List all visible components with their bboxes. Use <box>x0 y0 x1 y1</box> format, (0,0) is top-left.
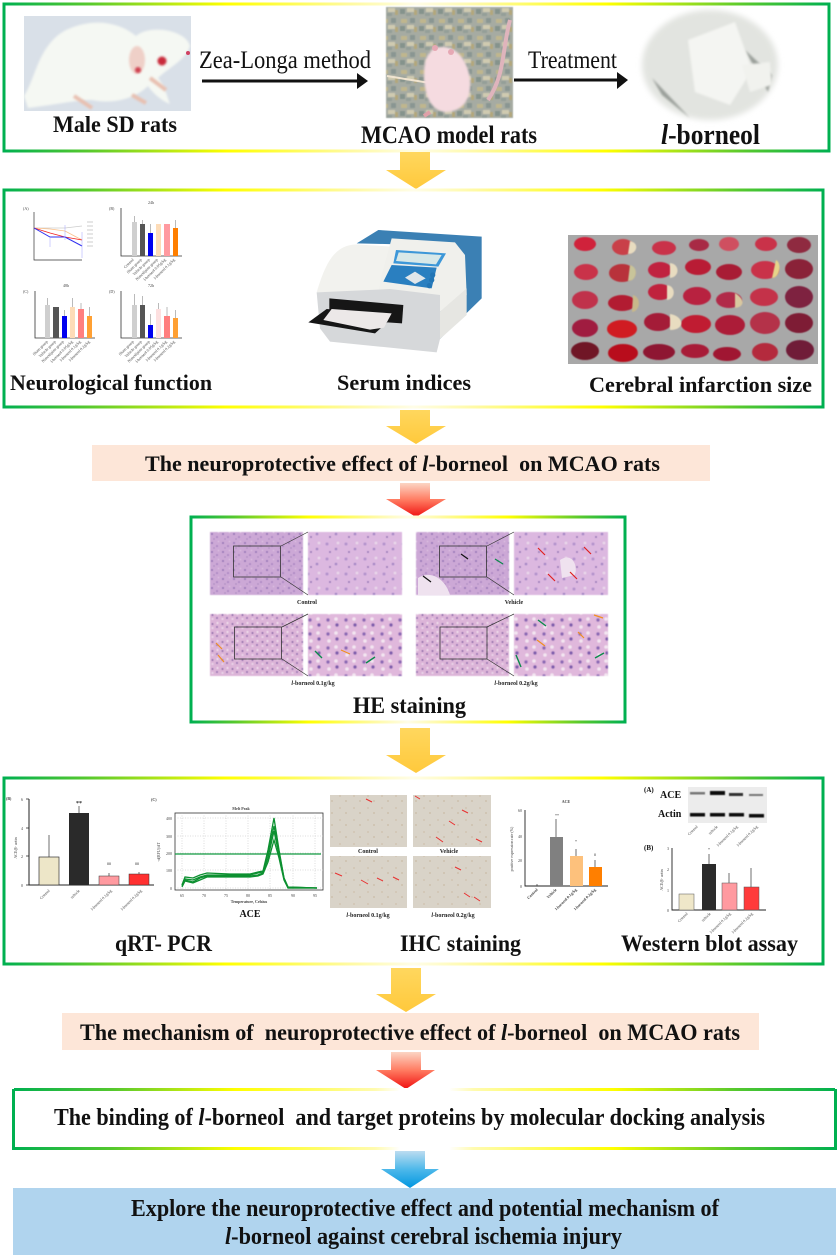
images: IHC micrographs: Control <box>358 849 378 855</box>
label: qRT-PCR: qRT- PCR <box>115 931 212 956</box>
chart: Western blot bars: l-borneol 0.1g/kg <box>709 911 732 934</box>
chart: melt peak curve: Melt Peak <box>232 806 250 811</box>
chart: Western blot bars: 2 <box>667 867 669 872</box>
label: MCAO model rats: MCAO model rats <box>361 122 537 149</box>
chart: score bars (B) <box>109 200 182 282</box>
label: Western blot assay: Western blot assay <box>621 931 798 956</box>
label: Serum indices: Serum indices <box>337 370 471 395</box>
chart: neurological score line (A): (A) <box>23 206 29 211</box>
chart: score bars (C): Vehicle group <box>37 339 57 358</box>
arrow: yellow down 2 <box>386 410 446 444</box>
arrow: red down 2 <box>376 1052 435 1089</box>
chart: IHC positive rate: ** <box>555 813 559 818</box>
chart: melt peak curve: 90 <box>291 893 295 898</box>
chart: IHC positive rate: * <box>575 839 577 844</box>
chart: IHC positive rate: ACE <box>562 799 571 804</box>
chart: qRT-PCR bars: Control <box>39 888 51 900</box>
chart: score bars (D) <box>109 283 182 364</box>
chart: melt peak curve: 300 <box>166 834 172 839</box>
photo: l-borneol crystals <box>642 10 778 120</box>
chart: melt peak curve: 400 <box>166 816 172 821</box>
label: Neurological function: Neurological function <box>10 370 212 395</box>
image: Western blot bands: vehicle <box>707 824 719 836</box>
chart: IHC positive rate: 60 <box>518 808 522 813</box>
chart: score bars (C) <box>23 283 95 364</box>
chart: qRT-PCR bars <box>6 796 154 911</box>
arrow: red down 1 <box>386 483 446 517</box>
image: Vehicle micrographs <box>416 532 608 606</box>
panel: HE staining <box>191 517 625 722</box>
chart: Western blot bars: * <box>708 847 710 852</box>
chart: qRT-PCR bars: 6 <box>21 797 23 802</box>
chart: IHC positive rate: 40 <box>518 834 522 839</box>
image: l-borneol 0.2 micrographs <box>416 614 608 687</box>
chart: melt peak curve: 100 <box>166 868 172 873</box>
chart: neurological score line (A) <box>23 206 93 260</box>
label: Cerebral infarction size: Cerebral infarction size <box>589 372 812 397</box>
text: Zea-Longa method: Zea-Longa method <box>199 47 371 74</box>
chart: qRT-PCR bars: 2 <box>21 854 23 859</box>
conclusion box: Explore the neuroprotective effect and potential mechanism of <box>131 1196 720 1222</box>
chart: score bars (C): l-borneol 0.05g/kg <box>49 339 74 364</box>
chart: score bars (B): 24h <box>148 200 154 205</box>
banner: neuroprotective effect <box>92 445 710 481</box>
chart: melt peak curve: 70 <box>202 893 206 898</box>
chart: score bars (D): (D) <box>109 289 115 294</box>
chart: score bars (C): (C) <box>23 289 29 294</box>
chart: Western blot bars: (B) <box>644 844 654 852</box>
chart: Western blot bars: 0 <box>667 908 669 913</box>
chart: IHC positive rate: l-borneol 0.1g/kg <box>554 887 578 911</box>
chart: IHC positive rate: positive expression rate (%) <box>509 826 514 871</box>
chart: Western blot bars: 3 <box>667 846 669 851</box>
image: Vehicle micrographs: Vehicle <box>505 600 524 606</box>
chart: melt peak curve: 95 <box>313 893 317 898</box>
chart: IHC positive rate: Vehicle <box>545 887 558 899</box>
chart: score bars (D): l-borneol 0.2g/kg <box>153 339 176 362</box>
chart: Western blot bars <box>644 844 766 934</box>
chart: Western blot bars: ACE/β- actin <box>659 869 664 891</box>
conclusion box <box>13 1188 836 1255</box>
chart: qRT-PCR bars: ## <box>135 861 139 866</box>
chart: melt peak curve: 85 <box>268 893 272 898</box>
image: l-borneol 0.2 micrographs: l-borneol 0.2g/kg <box>494 681 538 687</box>
panel: molecular docking <box>12 1089 837 1150</box>
chart: qRT-PCR bars: 0 <box>21 883 23 888</box>
chart: melt peak curve: -d(RFU)/dT <box>156 842 161 862</box>
images: IHC micrographs <box>330 795 491 919</box>
chart: melt peak curve: 65 <box>180 893 184 898</box>
chart: melt peak curve: 75 <box>224 893 228 898</box>
chart: score bars (B): Sham group <box>125 257 143 274</box>
image: Western blot bands: (A) <box>644 786 654 794</box>
chart: score bars (B): l-borneol 0.1g/kg <box>153 257 176 280</box>
chart: Western blot bars: vehicle <box>700 911 712 923</box>
chart: IHC positive rate <box>509 799 608 911</box>
chart: score bars (D): l-borneol 0.1g/kg <box>145 339 168 362</box>
chart: score bars (C): Sham group <box>31 339 49 356</box>
chart: melt peak curve <box>151 797 323 920</box>
text: Treatment: Treatment <box>528 47 617 74</box>
chart: score bars (B): Vehicle group <box>131 257 151 276</box>
chart: score bars (B): Nimodipine group <box>134 257 159 282</box>
chart: melt peak curve: ACE <box>239 909 261 920</box>
arrow: Zea-Longa <box>202 73 368 89</box>
photo: MCAO model rat <box>386 7 513 118</box>
image: Control micrographs <box>210 532 402 606</box>
chart: melt peak curve: 80 <box>246 893 250 898</box>
photo: male SD rat <box>24 16 191 111</box>
chart: qRT-PCR bars: (B) <box>6 796 12 801</box>
chart: Western blot bars: Control <box>677 911 689 923</box>
chart: score bars (C): 48h <box>63 283 69 288</box>
chart: qRT-PCR bars: ## <box>107 861 111 866</box>
chart: qRT-PCR bars: ** <box>76 801 82 807</box>
arrow: yellow down 3 <box>386 728 446 773</box>
chart: score bars (D): l-borneol 0.05g/kg <box>134 339 159 364</box>
icon: microplate reader <box>308 230 482 352</box>
arrow: blue down <box>381 1151 439 1188</box>
label: l-borneol: l-borneol <box>661 120 760 151</box>
image: Western blot bands: ACE <box>660 790 681 801</box>
chart: Western blot bars: l-borneol 0.2g/kg <box>731 911 754 934</box>
chart: IHC positive rate: 0 <box>520 884 522 889</box>
chart: qRT-PCR bars: l-borneol 0.2g/kg <box>120 888 143 911</box>
banner: mechanism: The mechanism of neuroprotective effect of l-borneol on MCAO rats <box>80 1020 740 1045</box>
chart: Western blot bars: 1 <box>667 888 669 893</box>
images: IHC micrographs: Vehicle <box>440 849 459 855</box>
banner: neuroprotective effect: The neuroprotective effect of l-borneol on MCAO rats <box>145 451 660 476</box>
image: Control micrographs: Control <box>297 600 317 606</box>
chart: melt peak curve: 200 <box>166 851 172 856</box>
chart: qRT-PCR bars: 4 <box>21 826 23 831</box>
chart: score bars (B): l-borneol 0.05g/kg <box>142 257 167 282</box>
chart: qRT-PCR bars: vehicle <box>69 888 81 900</box>
label: HE staining: HE staining <box>353 693 466 718</box>
panel: neuroprotective assays <box>4 190 823 407</box>
chart: score bars (C): l-borneol 0.2g/kg <box>68 339 91 362</box>
chart: IHC positive rate: # <box>594 852 596 857</box>
chart: score bars (D): Sham group <box>117 339 135 356</box>
image: Western blot bands: Control <box>687 824 699 836</box>
chart: score bars (C): l-borneol 0.1g/kg <box>59 339 82 362</box>
chart: melt peak curve: (C) <box>151 797 157 802</box>
chart: melt peak curve: 0 <box>170 886 172 891</box>
image: Western blot bands <box>644 786 767 847</box>
panel: animal model and treatment <box>4 4 829 151</box>
label: Male SD rats: Male SD rats <box>53 112 177 137</box>
arrow: treatment <box>514 72 628 89</box>
chart: IHC positive rate: 20 <box>518 858 522 863</box>
chart: score bars (B): Control <box>123 257 135 269</box>
image: l-borneol 0.1 micrographs: l-borneol 0.1g/kg <box>291 681 335 687</box>
chart: score bars (D): Vehicle group <box>123 339 143 358</box>
chart: score bars (B): (B) <box>109 206 115 211</box>
image: TTC brain slices <box>568 235 818 364</box>
images: IHC micrographs: l-borneol 0.2g/kg <box>431 913 475 919</box>
label: IHC staining: IHC staining <box>400 931 521 956</box>
chart: score bars (D): 72h <box>148 283 154 288</box>
chart: melt peak curve: Temperature, Celsius <box>231 899 268 904</box>
image: Western blot bands: l-borneol 0.1g/kg <box>716 824 739 847</box>
image: Western blot bands: Actin <box>658 809 682 820</box>
chart: score bars (C): Nimodipine group <box>40 339 65 364</box>
chart: qRT-PCR bars: ACE/β- actin <box>13 837 18 859</box>
panel: molecular docking: The binding of l-borneol and target proteins by molecular docking analysis <box>54 1105 765 1131</box>
chart: IHC positive rate: l-borneol 0.2g/kg <box>573 887 597 911</box>
banner: mechanism <box>62 1013 759 1050</box>
panel: mechanism assays <box>4 778 823 964</box>
conclusion box: l-borneol against cerebral ischemia injury <box>225 1224 622 1250</box>
image: l-borneol 0.1 micrographs <box>210 614 402 687</box>
arrow: yellow down 4 <box>376 968 436 1012</box>
arrow: yellow down 1 <box>386 152 446 189</box>
image: Western blot bands: l-borneol 0.2g/kg <box>736 824 759 847</box>
chart: score bars (D): Nimodipine group <box>126 339 151 364</box>
chart: qRT-PCR bars: l-borneol 0.1g/kg <box>90 888 113 911</box>
chart: IHC positive rate: Control <box>526 887 539 900</box>
images: IHC micrographs: l-borneol 0.1g/kg <box>346 913 390 919</box>
